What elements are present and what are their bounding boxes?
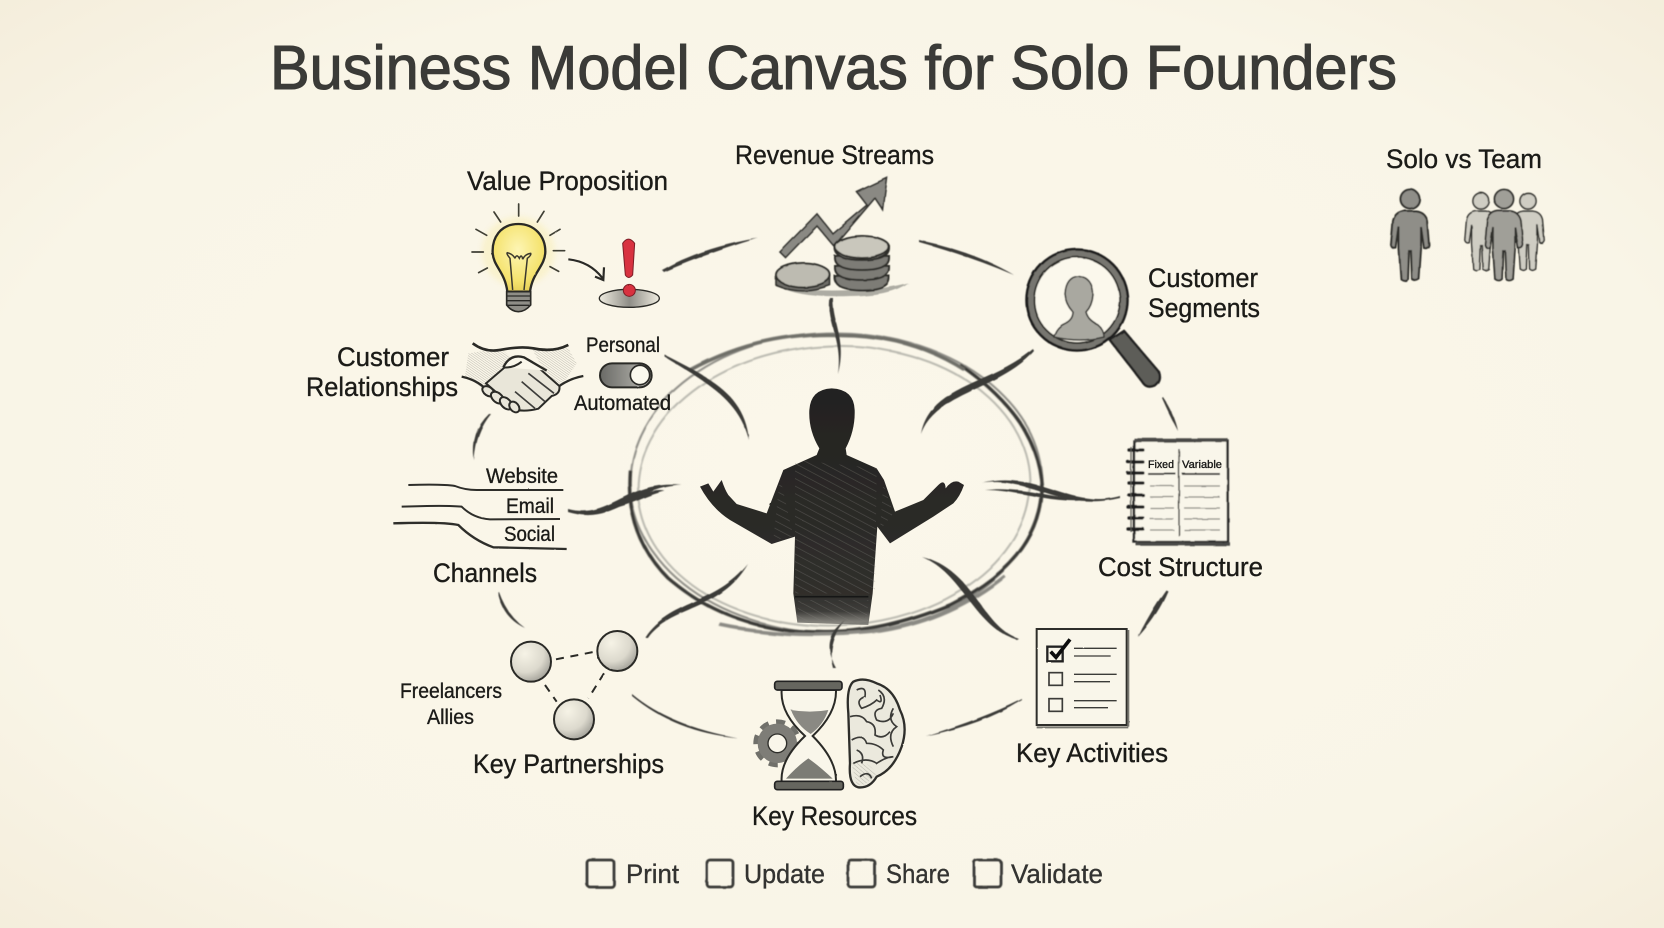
label: customer segments: Segments: [1148, 293, 1260, 323]
channel: email: Email: [506, 495, 554, 518]
partner: allies: Allies: [427, 706, 474, 729]
label: channels: Channels: [433, 558, 537, 588]
label: customer segments: [1148, 263, 1260, 323]
checkbox: update: [707, 859, 825, 889]
icon: rising arrow and coins: [775, 178, 908, 296]
small annotations: [400, 334, 671, 729]
notebook column headers: [1148, 459, 1222, 471]
section labels: [306, 140, 1542, 831]
spoke: key resources: [829, 620, 845, 668]
icon: magnifying glass with customer: [1026, 250, 1160, 387]
channel: social: Social: [504, 523, 555, 546]
checkbox: print: [587, 859, 679, 889]
label: customer segments: Customer: [1148, 263, 1258, 293]
spoke: customer segments: [921, 349, 1034, 434]
label: customer relationships: Relationships: [306, 372, 458, 402]
checkbox: validate: Validate: [1011, 859, 1103, 889]
arc: customer segments to cost structure: [1162, 397, 1178, 431]
arc: channels to customer relationships: [473, 414, 491, 460]
arc: key resources to key partnerships: [632, 694, 738, 738]
spoke: revenue streams: [829, 298, 841, 374]
arc: key partnerships to channels: [498, 592, 525, 628]
icon: solo person: [1391, 190, 1429, 280]
checkbox: validate: [974, 859, 1103, 889]
outer ring arcs and spokes: [473, 238, 1178, 738]
icon: light bulb and exclamation mark: [472, 204, 659, 312]
arc: key activities to key resources: [926, 699, 1022, 736]
action checkboxes: [587, 859, 1103, 889]
icon: gear, hourglass and brain: [757, 680, 905, 790]
toggle option: automated: Automated: [574, 392, 671, 415]
label: value proposition: Value Proposition: [467, 166, 668, 196]
icon: team of three people: [1465, 190, 1544, 280]
label: key partnerships: Key Partnerships: [473, 749, 664, 779]
spoke: channels: [568, 485, 682, 515]
label: cost structure: Cost Structure: [1098, 552, 1263, 582]
arc: value proposition to revenue streams: [662, 238, 758, 272]
toggle option: personal: Personal: [586, 334, 660, 357]
label: customer relationships: Customer: [337, 342, 449, 372]
icon: cost notebook: [1128, 440, 1230, 544]
icon: handshake: [462, 343, 583, 414]
partner: freelancers: Freelancers: [400, 680, 502, 703]
title: Business Model Canvas for Solo Founders: [270, 34, 1397, 103]
notebook column headers: Variable: [1182, 459, 1222, 471]
icon: checklist: [1037, 629, 1128, 727]
checkbox: print: Print: [626, 859, 679, 889]
notebook column headers: Fixed: [1148, 459, 1174, 471]
label: key activities: Key Activities: [1016, 738, 1168, 768]
central solo founder figure: [700, 388, 964, 625]
label: revenue streams: Revenue Streams: [735, 140, 934, 170]
checkbox: share: Share: [886, 859, 950, 889]
central ring: [629, 333, 1042, 634]
spoke: customer relationships: [665, 355, 749, 440]
label: customer relationships: [306, 342, 458, 402]
spoke: key partnerships: [645, 564, 748, 638]
icon: personal/automated toggle: [600, 363, 652, 387]
label: solo vs team: Solo vs Team: [1386, 144, 1542, 174]
spoke: cost structure: [982, 480, 1120, 501]
icon: channel lines: [393, 485, 567, 549]
icon: partnership network nodes: [511, 631, 637, 739]
arc: cost structure to key activities: [1138, 590, 1168, 637]
checkbox: share: [848, 859, 950, 889]
checkbox: update: Update: [744, 859, 825, 889]
arc: revenue streams to customer segments: [919, 240, 1014, 275]
spoke: key activities: [922, 557, 1019, 640]
channel: website: Website: [486, 465, 558, 488]
label: key resources: Key Resources: [752, 801, 917, 831]
